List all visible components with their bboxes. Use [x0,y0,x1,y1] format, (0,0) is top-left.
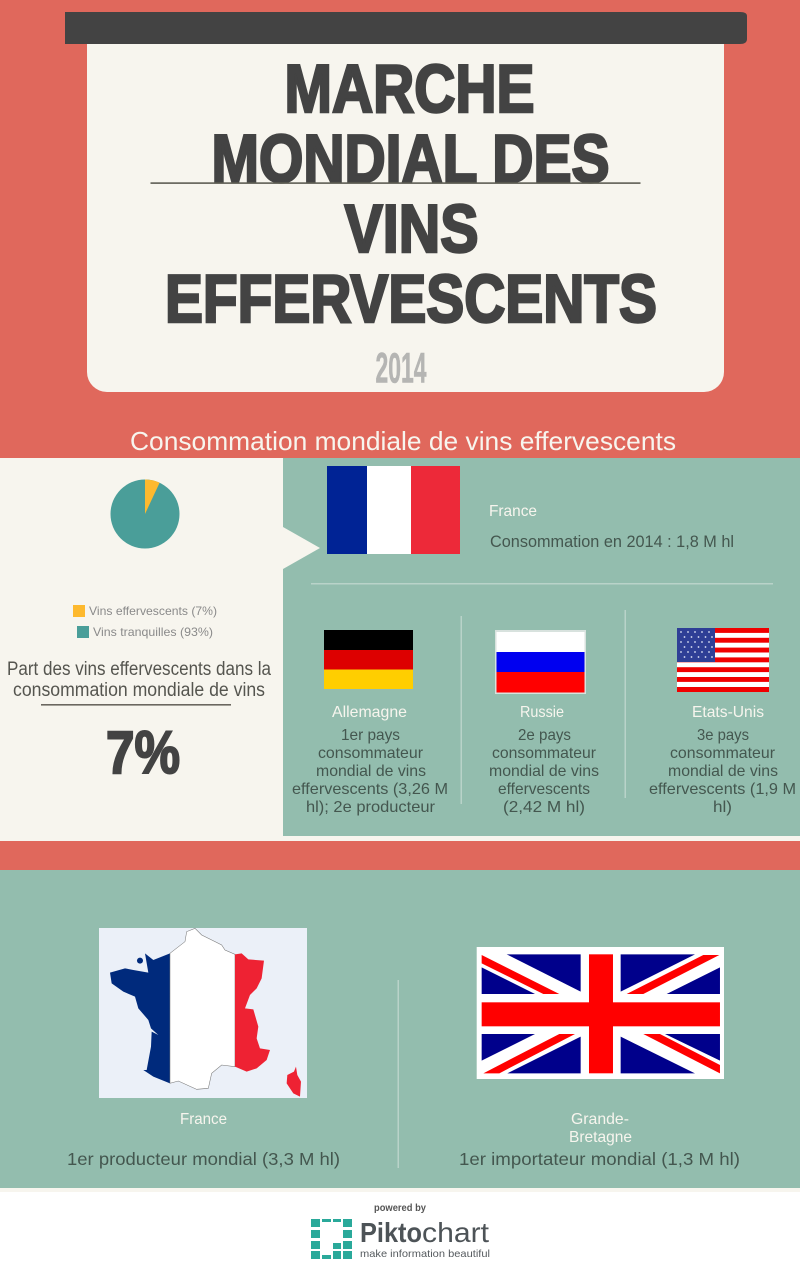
USA text: mondial de vins [668,763,778,780]
legend: Vins tranquilles (93%) [93,625,213,639]
flag: USA [677,628,769,692]
flag: Germany [324,630,413,689]
USA text: 3e pays [697,727,749,744]
footer: Piktochart logo: make information beautiful [360,1248,490,1260]
big number: 7% [106,719,180,786]
Germany text: effervescents (3,26 M [292,781,448,798]
Russia text: 2e pays [518,727,571,744]
Germany text: 1er pays [341,727,400,744]
panel: top consumers [283,458,800,841]
Germany text: hl); 2e producteur [306,799,436,816]
France text: France [180,1111,227,1128]
icon: Piktochart mark [311,1219,352,1259]
Russia text: mondial de vins [489,763,599,780]
Russia text: Russie [520,704,564,721]
UK text: Grande- [571,1111,629,1128]
title [150,51,657,337]
pie chart [110,479,180,548]
panel: title card [65,12,747,392]
panel: production and imports [0,870,800,1192]
footer: Piktochart logo: chart [422,1217,489,1248]
title: VINS [344,191,478,267]
France consumption: France [489,503,537,520]
footer: Piktochart logo [311,1203,490,1260]
France consumption: Consommation en 2014 : 1,8 M hl [490,532,734,551]
flag: United Kingdom [477,947,724,1079]
Germany text [292,704,448,816]
Russia text: (2,42 M hl) [503,799,585,816]
legend: Vins effervescents (7%) [89,604,217,618]
footer: Piktochart logo: powered by [374,1203,426,1214]
title: MONDIAL DES [212,121,610,197]
caption [7,659,271,701]
Russia text [489,704,599,816]
France text: 1er producteur mondial (3,3 M hl) [67,1149,340,1169]
panel: world share [0,458,283,841]
Germany text: mondial de vins [316,763,426,780]
heading: consommation: Consommation mondiale de vins effervescents [130,426,676,456]
Germany text: Allemagne [332,704,407,721]
Russia text: effervescents [498,781,590,798]
UK text [459,1111,740,1169]
USA text: hl) [713,799,732,816]
Russia text: consommateur [492,745,597,762]
flag: France [327,466,460,554]
icon: France map [99,928,307,1098]
France consumption [489,503,734,551]
Germany text: consommateur [318,745,424,762]
UK text: 1er importateur mondial (1,3 M hl) [459,1149,740,1169]
UK text: Bretagne [569,1129,632,1146]
legend [73,604,217,639]
USA text: Etats-Unis [692,704,764,721]
footer: Piktochart logo: Pikto [360,1217,422,1248]
caption: consommation mondiale de vins [13,680,265,701]
title: EFFERVESCENTS [165,261,657,337]
France text [67,1111,340,1169]
USA text: effervescents (1,9 M [649,781,796,798]
USA text [649,704,796,816]
caption: Part des vins effervescents dans la [7,659,271,680]
title: MARCHE [284,51,534,127]
flag: Russia [495,630,586,694]
year: 2014 [376,344,427,392]
USA text: consommateur [670,745,776,762]
